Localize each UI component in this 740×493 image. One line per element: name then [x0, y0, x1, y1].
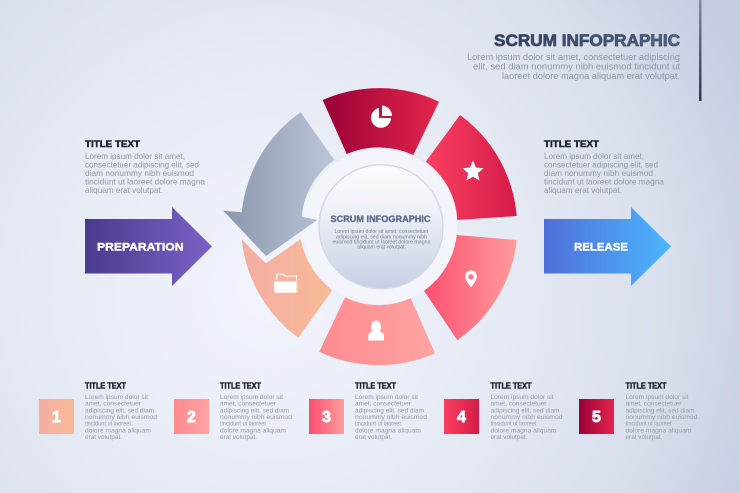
step 1: [39, 382, 157, 441]
main title: SCRUM INFOPRAPHIC: [494, 32, 680, 50]
step 4 text: [490, 382, 563, 441]
step 3 text: Lorem ipsum dolor sit: [355, 394, 418, 401]
icon: pie chart: [371, 106, 392, 128]
centre description: [332, 229, 431, 251]
left body: [85, 152, 205, 195]
segment: chart: [323, 88, 439, 155]
centre description: Lorem ipsum dolor sit amet, consectetuer: [334, 229, 429, 235]
icon: folder: [274, 274, 298, 293]
right body: [544, 152, 664, 195]
step 2 text: amet, consectetuer: [220, 401, 277, 408]
step 4 text: tincidunt ut laoreet: [490, 421, 537, 428]
step 3 text: TITLE TEXT: [355, 382, 396, 390]
left body: consectetuer adipiscing elit, sed: [85, 160, 199, 170]
step 4 text: erat volutpat.: [490, 434, 528, 441]
step 1 text: dolore magna aliquam: [85, 427, 151, 434]
step 4 text: Lorem ipsum dolor sit: [490, 394, 554, 401]
segment: location: [424, 235, 517, 340]
step 3 text: nonummy nibh euismod: [355, 414, 427, 421]
segment: folder: [242, 239, 332, 338]
centre description: aliquam erat volutpat.: [357, 245, 406, 251]
arrow: release: RELEASE: [574, 241, 628, 253]
step 2: [174, 382, 292, 441]
segment: user: [319, 297, 435, 365]
centre circle: [319, 165, 443, 289]
step 3 text: adipiscing elit, sed diam: [355, 407, 424, 414]
right body: diam nonummy nibh euismod: [544, 169, 653, 178]
centre description: euismod tincidunt ut laoreet dolore magna: [332, 240, 431, 246]
vertical accent bar: [699, 0, 702, 101]
step 5 text: TITLE TEXT: [626, 382, 667, 390]
step 5 text: dolore magna aliquam: [626, 427, 692, 434]
badge 3: 3: [322, 409, 331, 426]
step 1 text: nonummy nibh euismod: [85, 414, 157, 421]
arrow: grey return arrow: [223, 112, 334, 256]
step 5: [579, 382, 698, 441]
header description: [467, 52, 680, 81]
header description: laoreet dolore magna aliquam erat volutpat.: [502, 71, 680, 81]
step 5 text: tincidunt ut laoreet: [626, 421, 672, 428]
step 1 text: erat volutpat.: [85, 434, 122, 441]
icon: map pin: [465, 270, 477, 288]
arrow: preparation: PREPARATION: [97, 241, 184, 253]
step 1 text: [85, 382, 157, 441]
left title: TITLE TEXT: [85, 139, 140, 150]
step 3 text: dolore magna aliquam: [355, 427, 421, 434]
step 5 text: nonummy nibh euismod: [626, 414, 698, 421]
step 4 text: TITLE TEXT: [490, 382, 532, 390]
left body: Lorem ipsum dolor sit amet,: [85, 152, 185, 161]
segment: star: [426, 115, 517, 220]
step 4 text: amet, consectetuer: [490, 401, 547, 408]
icon: user: [368, 320, 384, 340]
step 1 text: amet, consectetuer: [85, 401, 142, 408]
step 4 text: nonummy nibh euismod: [490, 414, 563, 421]
header description: elit, sed diam nonummy nibh euismod tincidunt ut: [473, 62, 680, 72]
step 2 text: TITLE TEXT: [220, 382, 261, 390]
step 1 text: adipiscing elit, sed diam: [85, 407, 154, 414]
step 3 text: erat volutpat.: [355, 434, 392, 441]
right body: aliquam erat volutpat.: [544, 186, 622, 195]
centre description: adipiscing elit, sed diam nonummy nibh: [336, 234, 427, 240]
step 3 text: tincidunt ut laoreet: [355, 421, 401, 428]
badge 4: 4: [457, 409, 466, 426]
right text block: [544, 139, 664, 195]
step 5 text: [626, 382, 698, 441]
step 2 text: tincidunt ut laoreet: [220, 421, 266, 428]
step 2 text: nonummy nibh euismod: [220, 414, 292, 421]
step 4: [444, 382, 563, 441]
step 3 text: amet, consectetuer: [355, 401, 412, 408]
right body: consectetuer adipiscing elit, sed: [544, 160, 658, 170]
step 5 text: adipiscing elit, sed diam: [626, 407, 695, 414]
badge 2: 2: [187, 409, 196, 426]
cycle diagram: [223, 88, 517, 365]
left body: aliquam erat volutpat.: [85, 186, 163, 195]
step 5 text: Lorem ipsum dolor sit: [626, 394, 689, 401]
right title: TITLE TEXT: [544, 139, 599, 150]
step 1 text: Lorem ipsum dolor sit: [85, 394, 148, 401]
step 3: [309, 382, 427, 441]
step 2 text: erat volutpat.: [220, 434, 257, 441]
step 5 text: erat volutpat.: [626, 434, 663, 441]
step 3 text: [355, 382, 427, 441]
badge 1: 1: [52, 409, 61, 426]
left body: tincidunt ut laoreet dolore magna: [85, 178, 205, 186]
step 4 text: dolore magna aliquam: [490, 427, 557, 434]
icon: star: [462, 160, 484, 180]
step 2 text: [220, 382, 292, 441]
step 1 text: TITLE TEXT: [85, 382, 126, 390]
header description: Lorem ipsum dolor sit amet, consectetuer adipiscing: [467, 52, 680, 62]
step 2 text: dolore magna aliquam: [220, 427, 286, 434]
right body: Lorem ipsum dolor sit amet,: [544, 152, 644, 161]
step 2 text: adipiscing elit, sed diam: [220, 407, 289, 414]
right body: tincidunt ut laoreet dolore magna: [544, 178, 664, 186]
header: title and description: [467, 32, 680, 81]
step 5 text: amet, consectetuer: [626, 401, 682, 408]
step 4 text: adipiscing elit, sed diam: [490, 407, 560, 414]
left text block: [85, 139, 205, 195]
step 2 text: Lorem ipsum dolor sit: [220, 394, 283, 401]
arrow: preparation: [85, 207, 212, 286]
badge 5: 5: [592, 409, 601, 426]
centre title: SCRUM INFOGRAPHIC: [330, 214, 431, 224]
centre ring: [302, 149, 458, 304]
step 1 text: tincidunt ut laoreet: [85, 421, 131, 428]
left body: diam nonummy nibh euismod: [85, 169, 194, 178]
arrow: release: [544, 207, 671, 286]
